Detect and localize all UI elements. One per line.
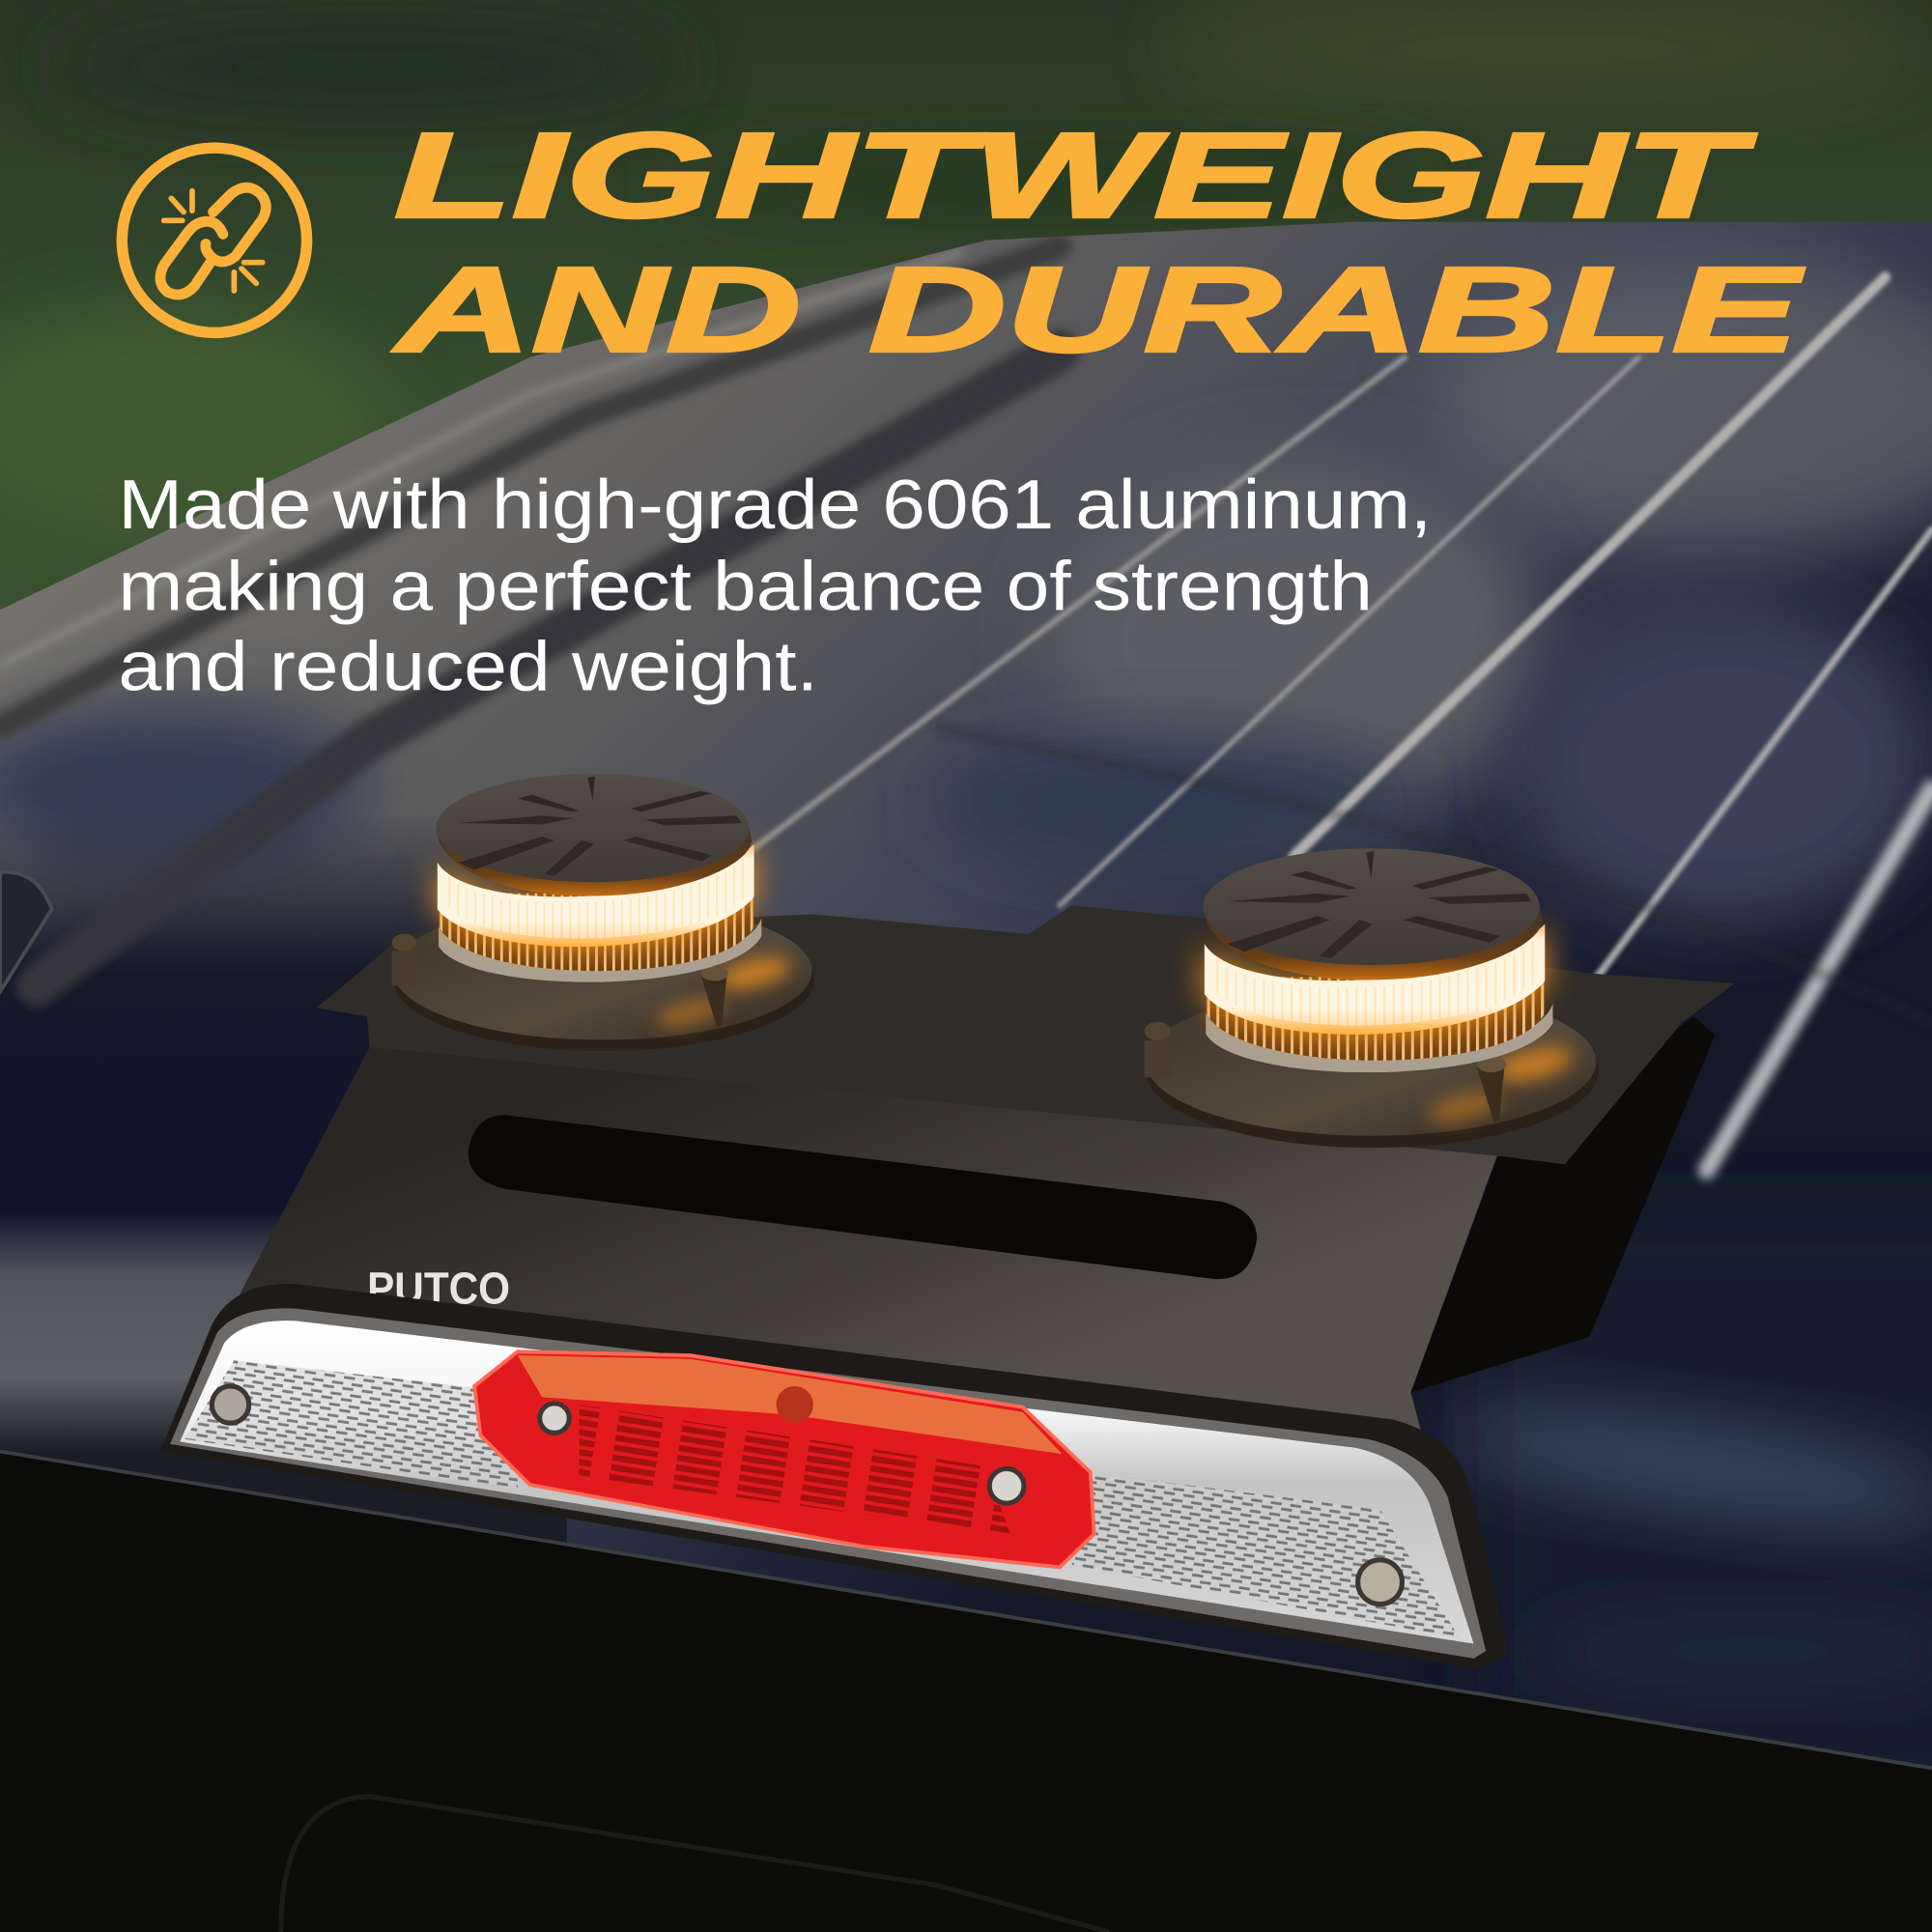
icon: broken chain link — [122, 148, 307, 332]
lower truck body — [0, 1452, 1932, 1932]
clear lens — [180, 1321, 1474, 1644]
bracket top plate — [317, 906, 1735, 1164]
description line 2: making a perfect balance of strength — [118, 547, 1373, 625]
amber beacon left — [392, 774, 814, 1051]
title line 2, first word: AND — [392, 243, 801, 378]
amber beacon right — [1145, 848, 1599, 1148]
description text — [118, 466, 1432, 705]
bracket slot — [469, 1115, 1257, 1279]
brake light housing — [160, 1284, 1510, 1668]
title line 2, second word: DURABLE — [868, 243, 1804, 378]
red stop lamp — [474, 1351, 1094, 1567]
title line 1: LIGHTWEIGHT — [394, 108, 1757, 242]
bracket side shadow — [1410, 1016, 1716, 1392]
title — [392, 108, 1804, 378]
roof ribs — [0, 246, 1932, 1171]
bracket front face — [234, 1047, 1497, 1472]
description line 3: and reduced weight. — [118, 627, 818, 705]
third brake light — [160, 1284, 1510, 1668]
description line 1: Made with high-grade 6061 aluminum, — [118, 466, 1432, 544]
lamp screws — [212, 1386, 1403, 1605]
mounting bracket — [234, 906, 1735, 1472]
side mirror — [0, 872, 52, 992]
bracket logo: PUTCO — [367, 1263, 510, 1313]
background: grass field — [0, 0, 1932, 640]
